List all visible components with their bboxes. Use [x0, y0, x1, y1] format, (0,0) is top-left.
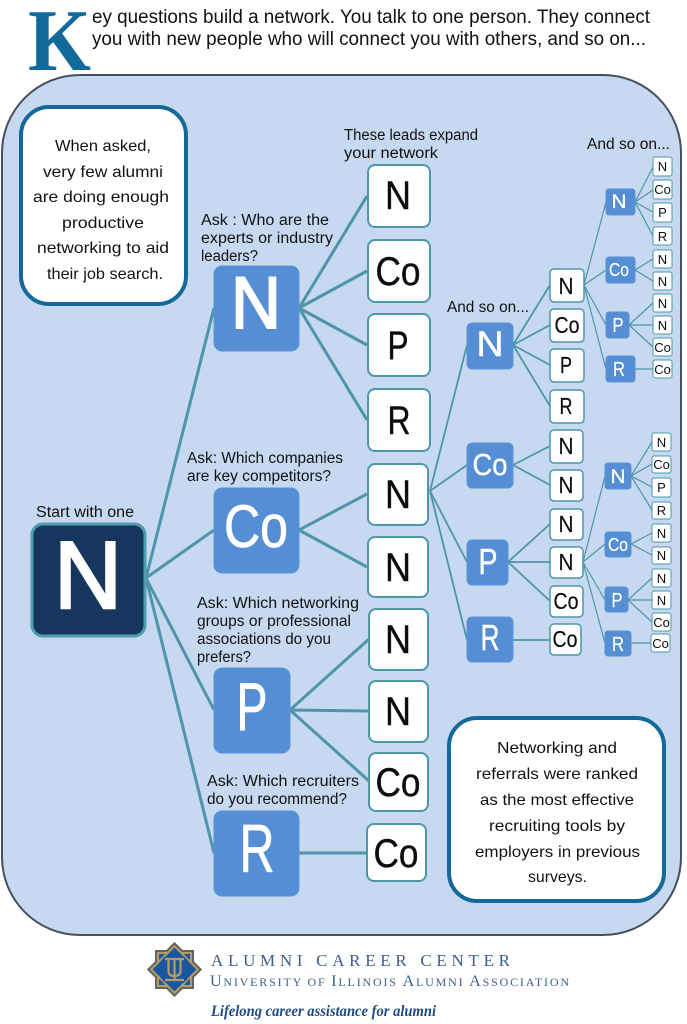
first level nodes [214, 263, 299, 896]
third level lead nodes: Co [554, 588, 578, 614]
tiny lead nodes, lower [651, 433, 671, 652]
tiny lead nodes, upper: R [658, 229, 667, 244]
tiny lead nodes, lower: P [657, 480, 666, 495]
fourth level blue nodes, upper: N [612, 192, 626, 213]
tiny lead nodes, lower: N [657, 526, 666, 541]
callout: alumni networking: very few alumni [43, 164, 163, 181]
second level lead nodes: Co [374, 832, 418, 876]
second level lead nodes: N [385, 473, 411, 517]
label: ask companies: are key competitors? [187, 468, 331, 485]
intro text: ey questions build a network. You talk to one person. They connect [92, 7, 651, 28]
callout: referrals: employers in previous [475, 844, 640, 861]
callout: referrals: as the most effective [480, 792, 634, 809]
footer: university of illinois alumni association: UNIVERSITY OF ILLINOIS ALUMNI ASSOCIATION [210, 973, 569, 990]
callout: referrals: Networking and [497, 740, 617, 757]
first level nodes: Co [224, 493, 288, 560]
root node N [32, 522, 145, 636]
callout: referrals: referrals were ranked [476, 766, 638, 783]
second level lead nodes [367, 165, 430, 881]
callout: alumni networking: productive [62, 215, 144, 232]
third level lead nodes: N [558, 273, 574, 299]
second level lead nodes: N [385, 690, 411, 734]
callout: alumni networking: are doing enough [33, 189, 169, 206]
fourth level blue nodes, lower [605, 463, 631, 656]
tiny lead nodes, lower: N [657, 548, 666, 563]
fourth level blue nodes, lower: Co [608, 535, 628, 555]
second level lead nodes: Co [376, 250, 420, 294]
tiny lead nodes, upper [653, 157, 672, 378]
callout: referrals [449, 718, 664, 901]
icon: alumni association star logo [147, 942, 202, 997]
third level lead nodes: N [558, 472, 574, 498]
third level lead nodes: N [558, 433, 574, 459]
label: ask experts [201, 212, 333, 265]
label: ask associations [197, 595, 359, 666]
second level lead nodes: N [385, 546, 411, 590]
tiny lead nodes, upper: N [658, 296, 667, 311]
third level lead nodes: R [560, 393, 572, 419]
label: these leads [344, 127, 478, 162]
callout: alumni networking [21, 107, 186, 304]
label: ask experts: Ask : Who are the [201, 212, 329, 229]
first level nodes: P [236, 669, 268, 745]
third level blue nodes: P [478, 541, 498, 582]
intro text [92, 7, 651, 50]
third level lead nodes: N [558, 511, 574, 537]
label: ask associations: prefers? [197, 649, 251, 666]
label: ask companies: Ask: Which companies [187, 450, 343, 467]
label: ask experts: experts or industry [201, 230, 333, 247]
tiny lead nodes, upper: N [658, 318, 667, 333]
tiny lead nodes, lower: N [657, 435, 666, 450]
label: ask associations: Ask: Which networking [197, 595, 359, 612]
third level lead nodes: N [558, 549, 574, 575]
intro text: you with new people who will connect you with others, and so on... [92, 29, 646, 50]
fourth level blue nodes, lower: P [612, 590, 622, 612]
tiny lead nodes, upper: Co [654, 340, 671, 355]
root node N: N [54, 522, 122, 629]
label: ask experts: leaders? [201, 248, 258, 265]
label: and so on top right: And so on... [587, 136, 670, 153]
label: ask associations: groups or professional [197, 613, 351, 630]
footer: tagline: Lifelong career assistance for alumni [210, 1003, 437, 1020]
label: ask recruiters: do you recommend? [207, 791, 347, 808]
callout: referrals: recruiting tools by [489, 818, 625, 835]
third level blue nodes: N [476, 325, 504, 364]
tiny lead nodes, upper: N [658, 159, 667, 174]
third level lead nodes: Co [554, 312, 580, 338]
fourth level blue nodes, upper [606, 189, 635, 382]
label: ask recruiters [207, 773, 359, 808]
second level lead nodes: N [385, 618, 411, 662]
first level nodes: R [240, 811, 274, 887]
label: these leads: These leads expand [344, 127, 478, 144]
third level blue nodes: R [480, 617, 500, 658]
tiny lead nodes, lower: Co [652, 636, 669, 651]
third level lead nodes: Co [552, 626, 578, 652]
fourth level blue nodes, upper: R [613, 359, 625, 381]
tiny lead nodes, lower: R [657, 503, 666, 518]
second level lead nodes: R [388, 399, 410, 443]
tiny lead nodes, lower: Co [653, 615, 670, 630]
label: these leads: your network [344, 145, 438, 162]
connector lines [146, 167, 653, 853]
label: and so on middle: And so on... [447, 299, 529, 316]
fourth level blue nodes, lower: R [612, 634, 624, 656]
third level lead nodes: P [560, 352, 572, 378]
fourth level blue nodes, lower: N [610, 467, 626, 488]
second level lead nodes: N [385, 174, 411, 218]
label: ask recruiters: Ask: Which recruiters [207, 773, 359, 790]
fourth level blue nodes, upper: Co [609, 260, 629, 280]
label: ask companies [187, 450, 343, 485]
tiny lead nodes, upper: Co [654, 362, 671, 377]
label: start with one: Start with one [36, 504, 134, 521]
second level lead nodes: Co [376, 761, 420, 805]
tiny lead nodes, upper: Co [654, 182, 671, 197]
tiny lead nodes, upper: N [658, 252, 667, 267]
third level blue nodes [467, 323, 513, 662]
callout: alumni networking: their job search. [47, 266, 163, 283]
third level blue nodes: Co [472, 447, 508, 482]
third level lead nodes [550, 269, 584, 655]
tiny lead nodes, upper: P [658, 205, 667, 220]
tiny lead nodes, lower: Co [653, 457, 670, 472]
second level lead nodes: P [388, 324, 408, 368]
callout: alumni networking: When asked, [55, 138, 151, 155]
callout: referrals: surveys. [528, 869, 587, 886]
footer: alumni career center: ALUMNI CAREER CENTER [211, 951, 511, 970]
label: ask associations: associations do you [197, 631, 331, 648]
tiny lead nodes, lower: N [657, 571, 666, 586]
fourth level blue nodes, upper: P [612, 315, 624, 337]
tiny lead nodes, upper: N [658, 274, 667, 289]
tiny lead nodes, lower: N [657, 593, 666, 608]
first level nodes: N [231, 263, 281, 344]
callout: alumni networking: networking to aid [37, 240, 169, 257]
